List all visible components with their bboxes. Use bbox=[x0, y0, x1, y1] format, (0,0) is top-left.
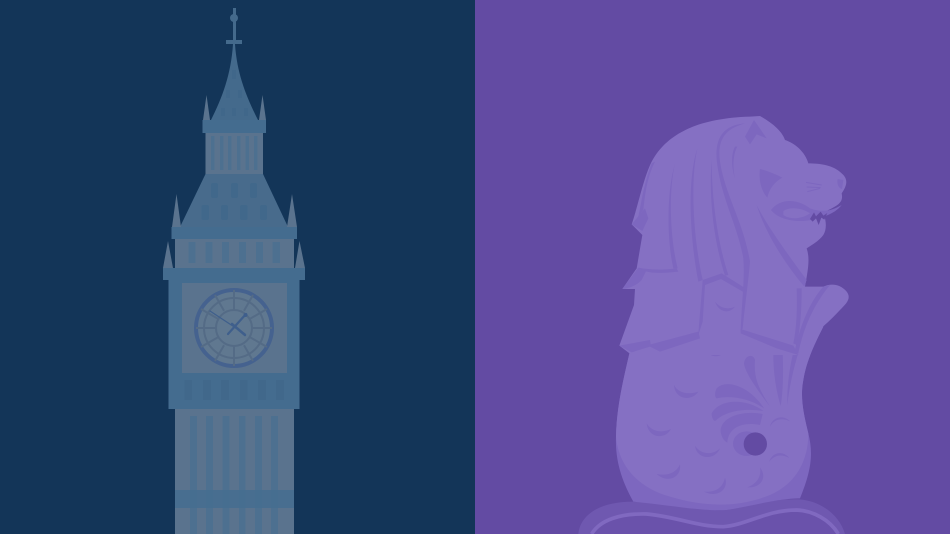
middle band bbox=[172, 227, 297, 239]
clock face bbox=[196, 290, 272, 366]
lantern bbox=[206, 133, 263, 174]
panel: navy background bbox=[0, 0, 475, 534]
middle pinnacles bbox=[172, 194, 297, 227]
lion head and mane bbox=[619, 116, 849, 355]
icon: clock tower bbox=[163, 8, 305, 534]
icon: merlion statue bbox=[578, 116, 849, 534]
panel: purple background bbox=[475, 0, 950, 534]
roof windows bbox=[202, 183, 267, 220]
teeth bbox=[810, 212, 827, 225]
clock panel bbox=[182, 283, 287, 373]
upper pinnacles bbox=[203, 95, 266, 120]
mane shading bbox=[619, 120, 843, 355]
lantern stripes bbox=[211, 136, 258, 170]
spire windows bbox=[221, 70, 248, 116]
shaft band bbox=[175, 490, 294, 508]
shaft stripes bbox=[190, 416, 278, 534]
scales bbox=[647, 343, 790, 494]
fish body bbox=[616, 320, 823, 510]
clock block bbox=[168, 280, 300, 409]
mouth opening bbox=[783, 208, 810, 218]
lower block windows bbox=[184, 380, 284, 400]
tower spire bbox=[211, 8, 258, 120]
belfry windows bbox=[188, 242, 280, 263]
tail fin fronds bbox=[712, 330, 805, 443]
upper band bbox=[202, 120, 266, 133]
fish eye bbox=[733, 431, 760, 456]
pedestal bbox=[578, 499, 845, 534]
cornice bbox=[163, 268, 305, 280]
belfry bbox=[175, 239, 294, 268]
roof bbox=[180, 174, 288, 227]
lower pinnacles bbox=[163, 241, 305, 268]
clock hands bbox=[210, 311, 247, 335]
shaft bbox=[175, 409, 294, 534]
muzzle lines bbox=[806, 182, 822, 192]
